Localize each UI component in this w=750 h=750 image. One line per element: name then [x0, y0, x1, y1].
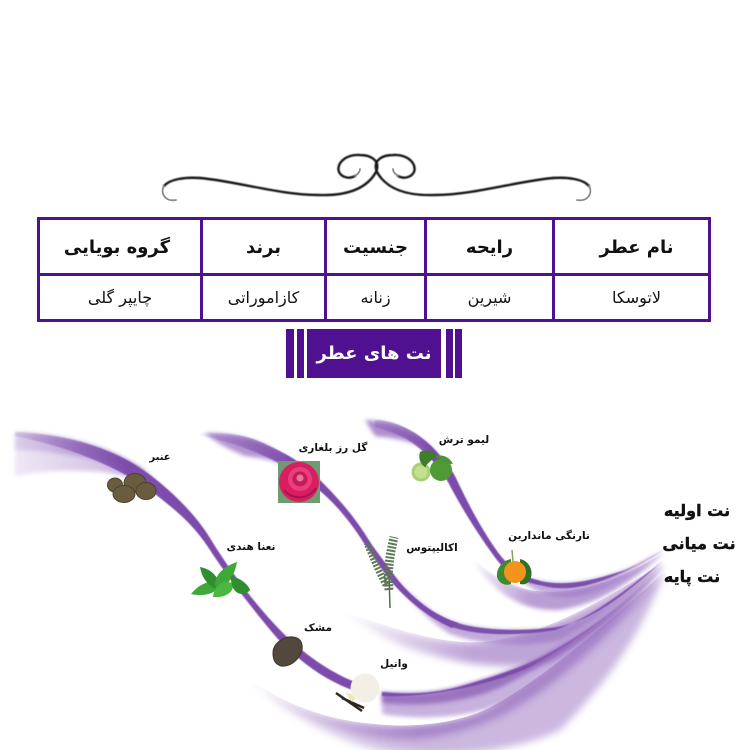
label: top note: نت اولیه: [664, 501, 730, 520]
label: musk: مشک: [304, 622, 332, 634]
value: gender: زنانه: [360, 288, 391, 306]
table: perfume details: [37, 217, 711, 322]
label: eucalyptus: اکالیپتوس: [406, 542, 458, 554]
icon: musk: [272, 636, 303, 667]
value: perfume name: لاتوسکا: [612, 288, 661, 306]
ribbon: middle note upper fan: [395, 560, 664, 645]
value: brand: کازاموراتی: [228, 288, 299, 306]
ribbon: middle note core: [200, 433, 458, 628]
label: mint: نعنا هندی: [226, 541, 276, 553]
ribbon: top note upper fan: [498, 550, 664, 597]
ornament: swirl flourish: [162, 152, 592, 202]
label: bulgarian rose: گل رز بلغاری: [299, 441, 368, 454]
ribbon: base note upper fan: [382, 566, 664, 717]
icon: limes: [412, 450, 453, 482]
banner: perfume notes heading: [286, 329, 462, 378]
header: brand: برند: [246, 236, 281, 258]
ribbon: top note core: [375, 420, 540, 585]
icon: mandarin: [496, 550, 532, 585]
ribbon: base note left fan: [15, 432, 172, 500]
header: gender: جنسیت: [343, 236, 408, 258]
value: olfactory group: چایپر گلی: [88, 288, 152, 306]
banner: perfume notes heading: نت های عطر: [316, 343, 432, 364]
label: ambergris: عنبر: [148, 452, 171, 463]
icon: vanilla: [335, 674, 380, 712]
ribbon: middle note lower fan: [345, 562, 664, 666]
icon: bulgarian rose: [278, 461, 320, 503]
value: scent: شیرین: [468, 288, 511, 306]
ribbon: base note core: [15, 432, 355, 690]
icon: mint leaves: [191, 562, 250, 598]
ribbon: top note lower fan: [472, 552, 664, 610]
ribbon: top note left fan: [365, 420, 440, 456]
header: scent: رایحه: [466, 236, 513, 258]
icon: ambergris: [107, 473, 156, 503]
header: olfactory group: گروه بویایی: [64, 236, 170, 258]
chart: note ribbons: [12, 417, 666, 750]
ribbon: base note lower fan: [250, 572, 664, 750]
header: perfume name: نام عطر: [600, 236, 674, 258]
label: base note: نت پایه: [664, 567, 720, 587]
label: lime: لیمو ترش: [439, 434, 489, 446]
ribbon: middle note left fan: [205, 433, 300, 472]
label: middle note: نت میانی: [662, 534, 736, 553]
label: mandarin: نارنگی ماندارین: [508, 529, 590, 542]
icon: eucalyptus: [364, 536, 398, 608]
label: vanilla: وانیل: [380, 658, 408, 670]
